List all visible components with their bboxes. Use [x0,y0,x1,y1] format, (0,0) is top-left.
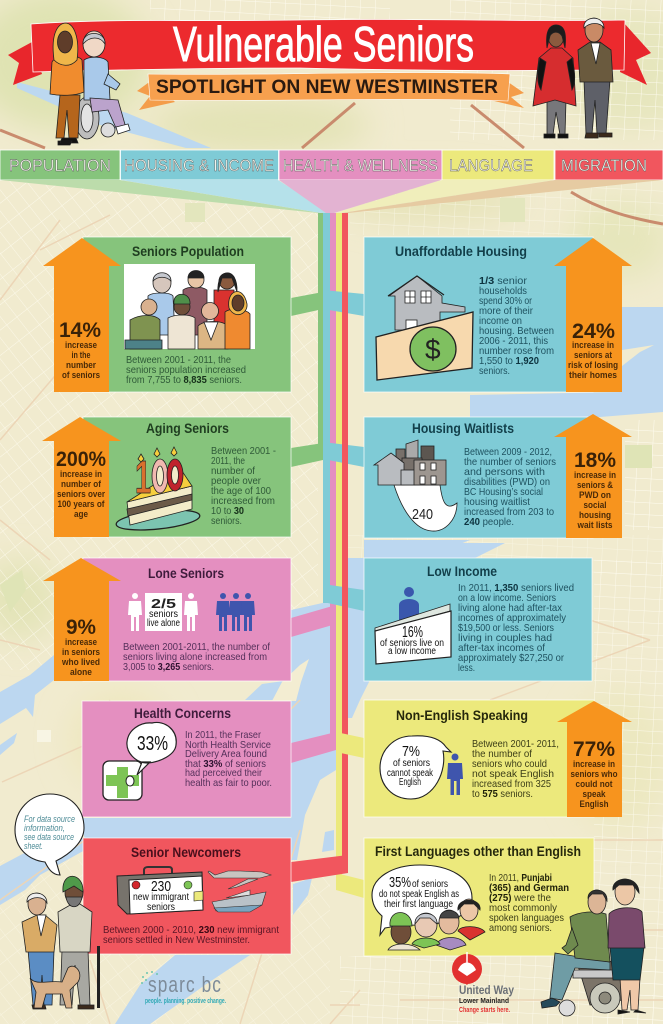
panel: Unaffordable Housing: 1,550 to 1,920 [479,356,539,367]
illustration: woman in red dress and man in jacket [533,18,613,138]
icon: health cross with 33% speech bubble [103,722,176,800]
illustration: birthday cake with 100 candles: 1 [135,451,151,503]
panel: Senior Newcomers [83,838,291,954]
speech bubble and four faces: their first language [384,899,453,910]
icon: house in a wallet with dollar sign: $ [425,334,441,365]
panel: Lone Seniors: Between 2001-2011, the number of [123,642,270,653]
panel: Non-English Speaking [364,700,632,817]
arrow: 14% increase: 14% [59,319,101,342]
panel: Aging Seniors: Between 2001 - [211,446,276,457]
panel: Unaffordable Housing: income on [479,316,522,327]
panel: Low Income: incomes of approximately [458,613,567,624]
illustration: man in power wheelchair and woman standing [541,879,646,1016]
icon: speech bubble with 7% and person [380,736,463,799]
arrow: 77% increase: seniors who [570,768,618,779]
funnel from tabs to coloured lines [0,180,663,213]
panel: Seniors Population: Seniors Population [132,243,244,259]
logo: United Way Lower Mainland: Lower Mainland [459,996,509,1005]
category tabs: MIGRATION [561,156,647,175]
category tabs: LANGUAGE [449,156,533,175]
panel: Aging Seniors: people over [211,476,261,487]
icon: 2/5 seniors live alone pictogram: live alone [147,618,180,629]
callout: data source note: see data source [24,832,74,842]
title: Vulnerable Seniors [173,18,474,72]
subtitle ribbon [137,73,524,110]
panel: Lone Seniors: Lone Seniors [148,565,224,581]
arrow: 77% increase: increase in [573,758,615,769]
panel: Housing Waitlists: increased from 203 to [464,507,554,518]
panel: Aging Seniors: increased from [211,496,275,507]
panel: Aging Seniors: 10 to 30 [211,506,244,517]
panel: Aging Seniors: 2011, the [211,456,245,467]
panel: Aging Seniors: the age of 100 [211,486,271,497]
icon: person with open book showing 16%: 16% [402,624,423,641]
subtitle ribbon: SPOTLIGHT ON NEW WESTMINSTER [156,77,498,98]
speech bubble and four faces [372,865,485,950]
panel: Health Concerns [82,701,291,817]
panel: Unaffordable Housing: spend 30% or [479,296,532,307]
panel: Non-English Speaking: not speak English [472,769,554,780]
logo: United Way Lower Mainland: Change starts here. [459,1007,510,1014]
panel: First Languages other than English [364,838,594,956]
panel: First Languages other than English: In 2011, Punjabi [489,873,552,884]
arrow: 200% increase: increase in [60,468,102,479]
panel: Unaffordable Housing: more of their [479,306,533,317]
panel: Low Income: Low Income [427,563,497,579]
panel: Aging Seniors [42,417,291,537]
panel: Low Income: approximately $27,250 or [458,653,564,664]
icon: person with open book showing 16%: of seniors live on [380,638,444,649]
logo: United Way Lower Mainland [452,952,515,1014]
panel: Seniors Population: from 7,755 to 8,835 seniors. [126,375,242,386]
arrow: 18% increase: housing [579,509,611,520]
arrow: 9% increase: increase [65,636,97,647]
panel: Low Income: after-tax incomes of [458,643,545,654]
panel: Housing Waitlists: the number of seniors [464,457,556,468]
icon: speech bubble with 7% and person: English [399,777,421,788]
panel: Unaffordable Housing: seniors. [479,366,510,377]
panel: Low Income: on a low income. Seniors [458,593,556,604]
panel: Housing Waitlists: housing waitlist [464,497,530,508]
panel: Health Concerns: In 2011, the Fraser [185,730,261,741]
panel: Health Concerns: North Health Service [185,740,271,751]
arrow: 18% increase: wait lists [577,519,612,530]
category tabs: HEALTH & WELLNESS [283,156,438,175]
panel: Low Income [364,558,592,681]
icon: airplane and ship [208,871,271,912]
icon: suitcase with 230 new immigrant seniors: new immigrant [133,892,189,903]
panel: Low Income: less. [458,663,475,674]
category tabs [0,150,663,180]
icon: person with open book showing 16%: a low income [388,646,436,657]
panel: First Languages other than English: among seniors. [489,923,552,934]
icon: health cross with 33% speech bubble: 33% [137,733,168,755]
panel: Unaffordable Housing: 1/3 senior [479,276,528,287]
arrow: 24% increase: seniors at [574,349,612,360]
icon: speech bubble with 7% and person: cannot speak [387,768,434,779]
panel: Housing Waitlists: Between 2009 - 2012, [464,447,552,458]
arrow: 14% increase: number [66,359,96,370]
arrow: 18% increase: social [584,499,606,510]
speech bubble and four faces: 35% [389,874,411,891]
arrow: 18% increase: increase in [574,469,616,480]
Fraser River [470,307,663,425]
panel: Health Concerns: had perceived their [185,768,262,779]
illustration: woman in hijab and senior in wheelchair [50,23,130,145]
panel: First Languages other than English: (275) were the [489,893,551,904]
logo: United Way Lower Mainland: United Way [459,985,515,997]
arrow: 14% increase: in the [72,349,90,360]
arrow: 77% increase [557,701,632,817]
panel: Unaffordable Housing: housing. Between [479,326,554,337]
arrow: 14% increase: of seniors [62,369,100,380]
panel: Health Concerns: health as fair to poor. [185,778,272,789]
panel: Non-English Speaking: Non-English Speaking [396,707,528,723]
arrow: 18% increase: seniors & [577,479,613,490]
panel: Aging Seniors: seniors. [211,516,242,527]
arrow: 9% increase: alone [70,666,92,677]
arrow: 14% increase: increase [65,339,97,350]
arrow: 18% increase [554,414,632,538]
panel: Health Concerns: Health Concerns [134,705,231,721]
callout: data source note: For data source [24,814,75,824]
panel: Unaffordable Housing: households [479,286,527,297]
arrow: 24% increase [554,238,632,392]
arrow: 18% increase: PWD on [579,489,611,500]
icon: 2/5 seniors live alone pictogram: 2/5 [151,596,176,611]
arrow: 200% increase: 100 years of [58,498,105,509]
panel: First Languages other than English: First Languages other than English [375,843,581,859]
arrow: 200% increase: 200% [56,448,106,471]
panel: Low Income: In 2011, 1,350 seniors lived [458,583,574,594]
arrow: 77% increase: speak [582,788,606,799]
logo: SPARC BC [141,971,226,1005]
arrow: 24% increase: 24% [572,320,615,343]
arrow: 14% increase [43,238,121,392]
arrow: 200% increase: number of [61,478,102,489]
panel: Non-English Speaking: the number of [472,749,532,760]
icon: house in a wallet with dollar sign [376,276,473,380]
speech bubble and four faces: do not speak English as [379,889,459,900]
logo: SPARC BC: people. planning. positive change. [145,998,226,1005]
panel: Lone Seniors: seniors living alone increased from [123,652,267,663]
illustration: two men with guide dog [22,876,100,1009]
speech bubble and four faces: of seniors [412,879,448,890]
panel: Aging Seniors: number of [211,466,255,477]
panel: Housing Waitlists: 240 people. [464,517,514,528]
panel: Unaffordable Housing: number rose from [479,346,554,357]
illustration: birthday cake with 100 candles [115,447,201,533]
illustration: group of seniors [124,264,255,349]
panel: Non-English Speaking: seniors who could [472,759,547,770]
panel: Senior Newcomers: Senior Newcomers [131,844,241,860]
panel: Non-English Speaking: Between 2001- 2011, [472,739,559,750]
arrow: 200% increase: age [74,508,88,519]
panel: Housing Waitlists: BC Housing’s social [464,487,543,498]
icon: person with open book showing 16% [375,587,451,664]
arrow: 24% increase: their homes [569,369,617,380]
panel: Non-English Speaking: increased from 325 [472,779,551,790]
logo: SPARC BC: sparc bc [148,972,222,997]
panel: Housing Waitlists: and persons with [464,467,545,478]
icon: 2/5 seniors live alone pictogram: seniors [149,609,178,620]
panel: Lone Seniors [43,558,291,681]
arrow: 9% increase: 9% [66,616,96,639]
arrow: 200% increase [42,417,121,537]
icon: suitcase with 230 new immigrant seniors: 230 [151,878,171,895]
arrow: 9% increase [43,558,121,681]
panel: First Languages other than English: most commonly [489,903,558,914]
arrow: 9% increase: in seniors [62,646,100,657]
arrow: 18% increase: 18% [574,449,616,472]
coloured lines and connectors [291,213,364,898]
arrow: 200% increase: seniors over [57,488,105,499]
icon: 2/5 seniors live alone pictogram [128,593,255,631]
icon: houses and waitlist scroll reading 240: 240 [412,506,433,523]
panel: Low Income: living alone had after-tax [458,603,563,614]
arrow: 24% increase: risk of losing [568,359,618,370]
arrow: 77% increase: 77% [573,738,615,761]
callout: data source note: information, [24,823,65,833]
banner: red ribbon [8,18,651,85]
icon: speech bubble with 7% and person: 7% [402,743,420,760]
panel: First Languages other than English: spoken languages [489,913,564,924]
arrow: 77% increase: English [580,798,609,809]
category tabs: POPULATION [9,156,111,175]
panel: Unaffordable Housing [364,237,632,392]
category tabs: HOUSING & INCOME [124,156,274,175]
panel: Low Income: living in couples had [458,633,552,644]
panel: Non-English Speaking: to 575 seniors. [472,789,533,800]
panel: Housing Waitlists: Housing Waitlists [412,420,514,436]
panel: Unaffordable Housing: 2006 - 2011, this [479,336,548,347]
panel: Seniors Population: seniors population increased [126,365,246,376]
callout: data source note [15,794,84,875]
icon: speech bubble with 7% and person: of seniors [393,758,430,769]
panel: First Languages other than English: (365) and German [489,883,569,894]
panel: Seniors Population: Between 2001 - 2011, the [126,355,231,366]
panel: Aging Seniors: Aging Seniors [146,420,229,436]
panel: Unaffordable Housing: Unaffordable Housing [395,243,527,259]
icon: suitcase with 230 new immigrant seniors [117,867,203,914]
arrow: 9% increase: who lived [61,656,100,667]
callout: data source note: sheet. [24,841,43,851]
icon: houses and waitlist scroll reading 240 [374,440,457,531]
panel: Seniors Population [43,237,291,392]
panel: Health Concerns: Delivery Area found [185,749,267,760]
arrow: 77% increase: could not [576,778,612,789]
panel: Senior Newcomers: Between 2000 - 2010, 230 new immigrant [103,925,279,936]
arrow: 24% increase: increase in [572,339,614,350]
panel: Low Income: $19,500 or less. Seniors [458,623,554,634]
icon: suitcase with 230 new immigrant seniors: seniors [147,902,175,913]
panel: Lone Seniors: 3,005 to 3,265 seniors. [123,662,214,673]
panel: Housing Waitlists [364,414,632,538]
panel: Housing Waitlists: disabilities (PWD) on [464,477,550,488]
panel: Senior Newcomers: seniors settled in New Westminster. [103,935,250,946]
panel: Health Concerns: that 33% of seniors [185,759,266,770]
